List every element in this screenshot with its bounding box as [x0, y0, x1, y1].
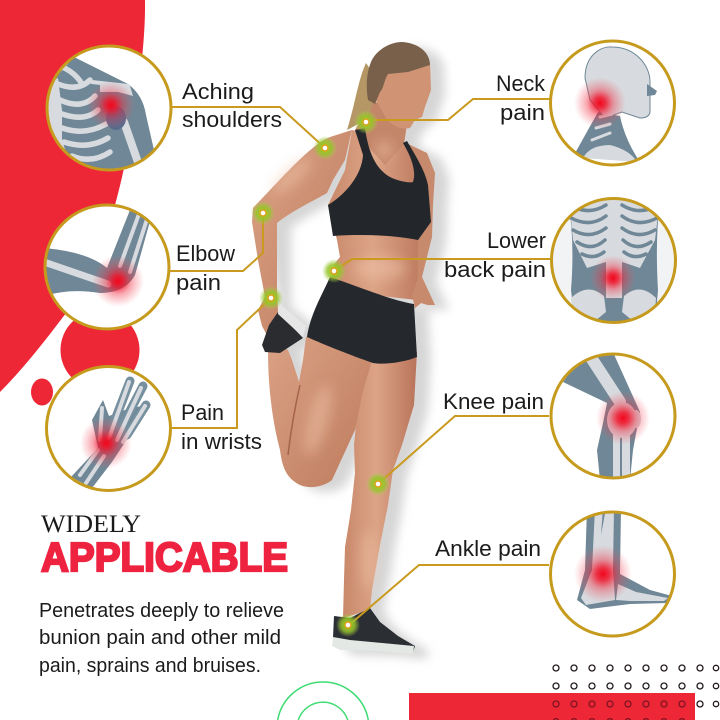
panel: ankle icon	[550, 508, 674, 636]
pain glow: neck	[574, 77, 626, 129]
pain glow: lower back	[590, 255, 636, 301]
panel: lower back icon	[552, 198, 676, 325]
label: lower back pain	[444, 228, 546, 282]
leader line: lower back	[334, 259, 551, 271]
face	[376, 62, 431, 129]
standing leg	[343, 352, 417, 618]
sports bra	[328, 128, 431, 240]
heading: WIDELY	[41, 511, 141, 538]
woman stretching figure	[252, 42, 435, 654]
marker: neck	[354, 110, 378, 134]
red background blob	[0, 0, 145, 392]
leader line: knee	[378, 416, 549, 484]
leader line: wrists	[171, 298, 271, 428]
marker: ankle	[336, 613, 360, 637]
panel: shoulder icon	[44, 46, 171, 175]
nose	[647, 84, 657, 96]
label: pain in wrists	[181, 400, 262, 454]
panel: knee icon	[551, 350, 675, 480]
pain glow: ankle	[574, 545, 632, 603]
description text	[39, 600, 284, 677]
leader line: elbow	[169, 213, 263, 271]
pain glow: elbow	[92, 255, 144, 307]
label: lower back pain: Lower	[487, 228, 546, 253]
marker: wrist	[259, 286, 283, 310]
torso	[328, 130, 428, 300]
highlights on skin	[267, 140, 406, 590]
heading	[41, 511, 288, 580]
label: elbow pain: Elbow	[176, 241, 235, 266]
hand on hip	[412, 278, 435, 308]
leader line: neck	[366, 99, 550, 120]
label: neck pain	[496, 71, 546, 125]
left arm	[252, 130, 352, 337]
panel: elbow icon	[44, 205, 169, 329]
raised leg	[268, 335, 372, 487]
description text: Penetrates deeply to relieve	[39, 600, 284, 622]
label: neck pain: Neck	[496, 71, 546, 96]
raised shoe	[262, 312, 303, 353]
label: pain in wrists: in wrists	[181, 429, 262, 454]
figure shadow	[266, 47, 449, 659]
shoe sole	[332, 637, 414, 654]
red bar bottom	[409, 693, 695, 720]
label: aching shoulders: shoulders	[182, 107, 282, 132]
panel: wrist icon	[46, 366, 170, 490]
right arm	[404, 142, 435, 308]
shorts	[307, 277, 417, 364]
green concentric arcs	[278, 682, 368, 720]
leader line: ankle	[348, 565, 549, 626]
label: pain in wrists: Pain	[181, 400, 224, 425]
marker: knee	[366, 472, 390, 496]
label: neck pain: pain	[500, 100, 545, 125]
pain glow: shoulder	[87, 81, 135, 129]
hair	[367, 42, 430, 104]
standing shoe	[333, 608, 415, 652]
label: lower back pain: back pain	[444, 257, 546, 282]
leader line: shoulders	[171, 107, 325, 148]
leg crease	[288, 385, 300, 455]
small red oval decoration	[31, 378, 53, 406]
raised shoe sole	[278, 303, 306, 337]
marker: elbow	[251, 201, 275, 225]
description text: bunion pain and other mild	[39, 627, 281, 649]
label: knee pain: Knee pain	[443, 389, 544, 414]
dotted ring pattern	[553, 665, 719, 720]
red circle decoration	[60, 310, 140, 390]
marker: shoulder	[313, 136, 337, 160]
description text: pain, sprains and bruises.	[39, 655, 261, 677]
label: elbow pain: pain	[176, 270, 221, 295]
neck	[355, 100, 408, 165]
label: aching shoulders: Aching	[182, 79, 254, 104]
marker: lower back	[322, 259, 346, 283]
pain glow: wrist	[80, 417, 132, 469]
label: aching shoulders	[182, 79, 282, 132]
ponytail	[347, 63, 374, 130]
label: elbow pain	[176, 241, 235, 295]
pain glow: knee	[596, 391, 650, 445]
heading: APPLICABLE	[41, 534, 288, 580]
label: ankle pain: Ankle pain	[435, 536, 541, 561]
panel: neck icon	[550, 41, 674, 165]
